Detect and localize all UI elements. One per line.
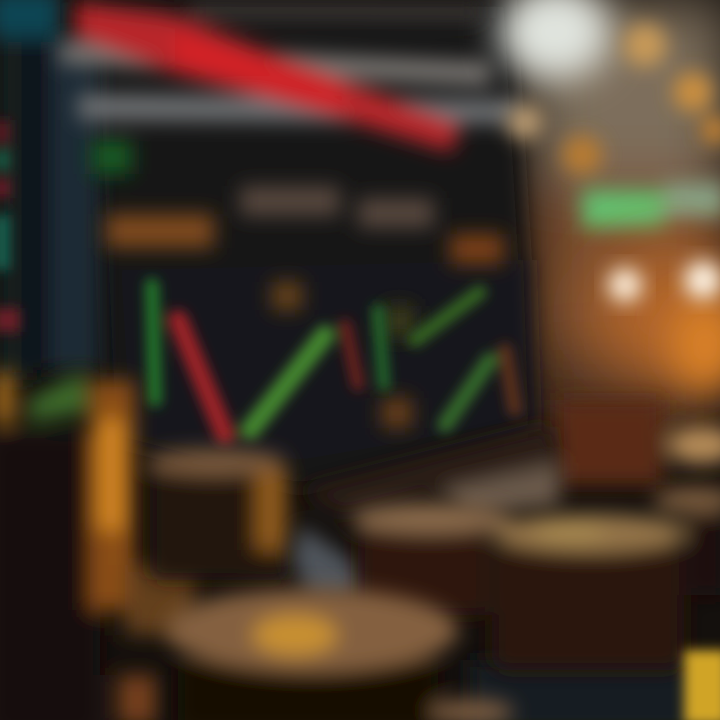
right wall warm background [530, 0, 720, 440]
left column [0, 0, 100, 380]
floor grey gap and table edge [292, 425, 720, 720]
left foreground cup [0, 370, 195, 720]
board rows: grey and red ticker bands [60, 2, 520, 428]
right table cups [350, 487, 720, 670]
front table cup [166, 588, 514, 720]
green sign [582, 182, 720, 228]
middle cup [145, 449, 288, 580]
left edge red and green ticker marks [0, 120, 20, 332]
right glass of beer [557, 400, 720, 485]
top right ceiling lights [499, 0, 611, 80]
orange glow with lamps [590, 245, 720, 390]
bottom right yellow light [684, 650, 720, 720]
chart lines: green and red candlesticks [152, 285, 515, 435]
trading board [90, 0, 535, 490]
